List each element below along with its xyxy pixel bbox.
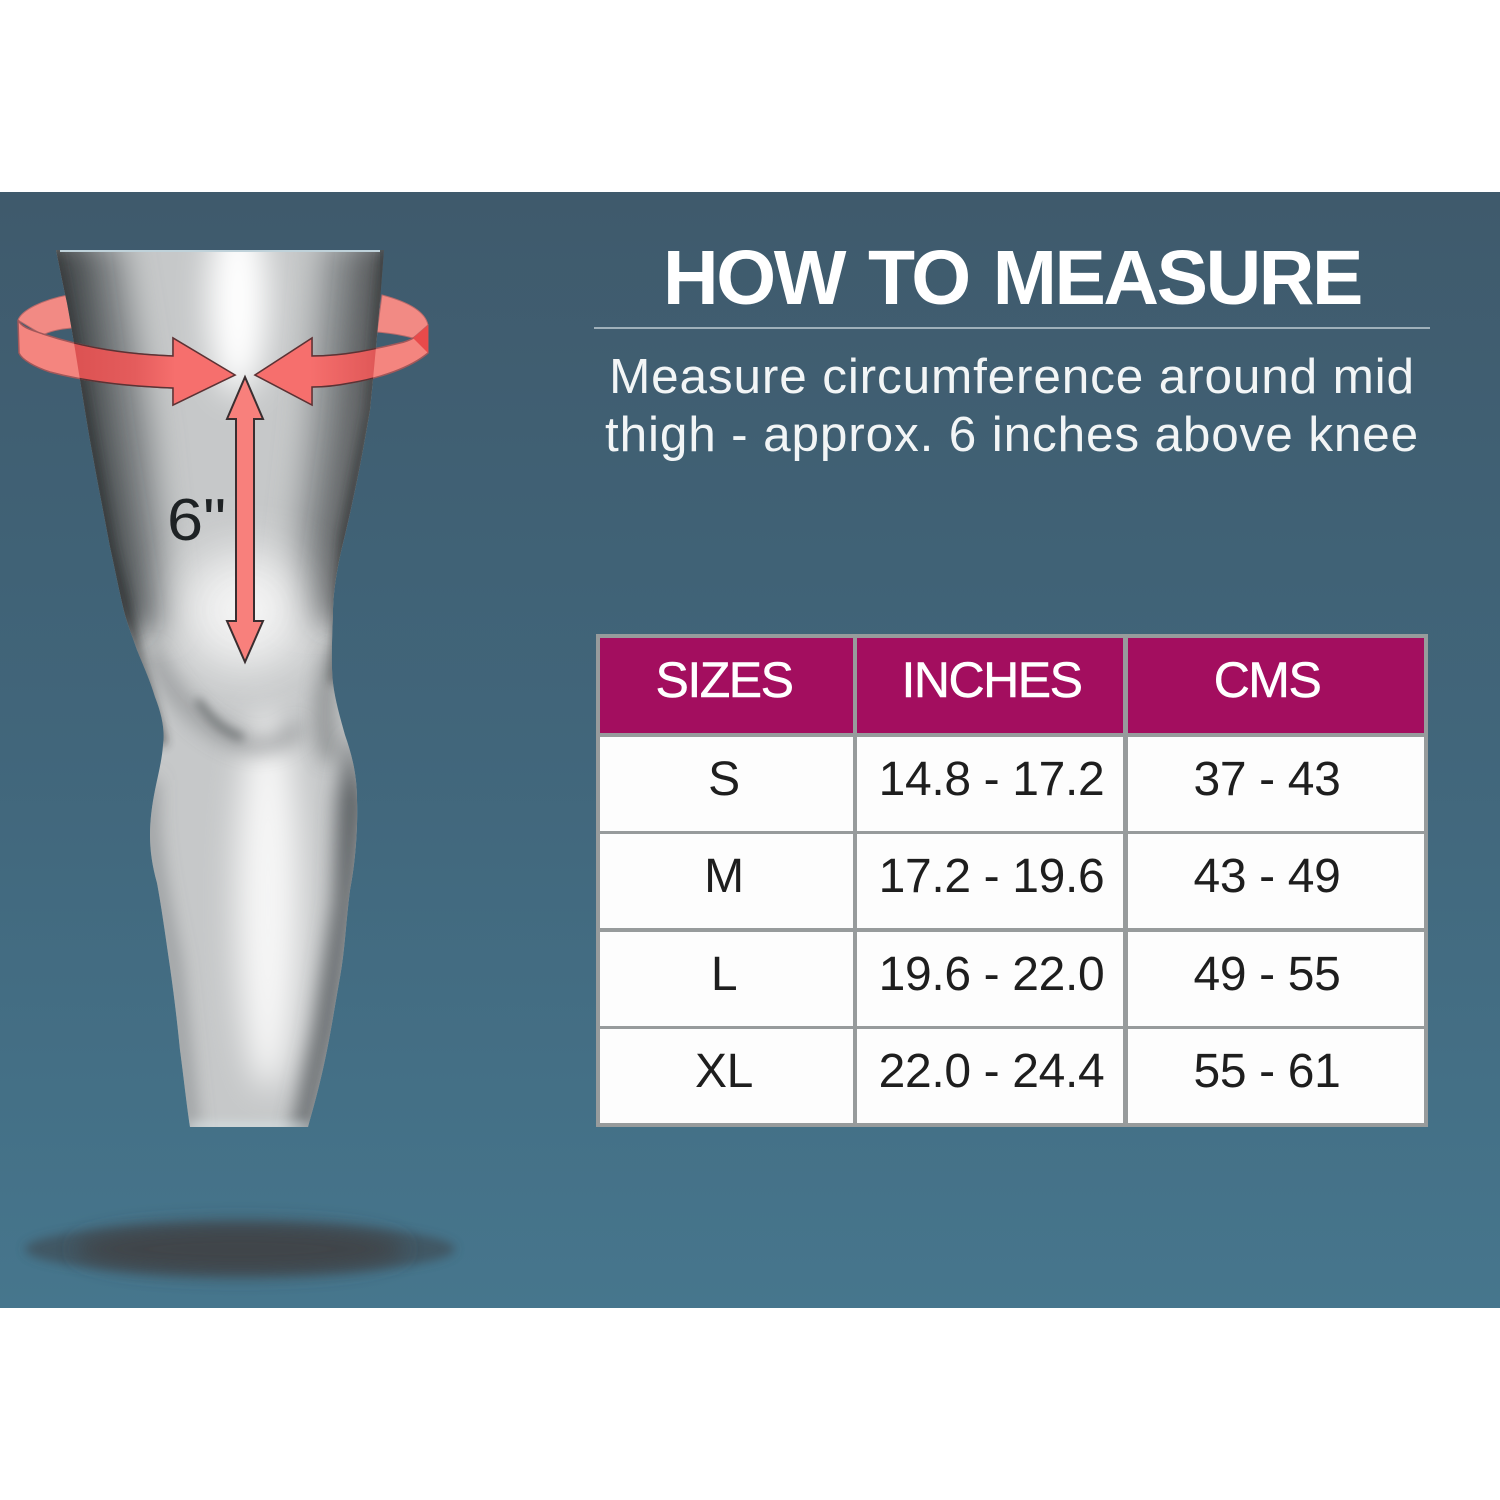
header: inches: INCHES [902,652,1081,708]
row XL size [600,1029,853,1123]
row XL inches [857,1029,1123,1123]
row M size: M [704,850,744,903]
header: cms [1128,638,1424,733]
row S size [600,737,853,831]
measuring band front left with arrow [18,320,235,405]
description [605,349,1419,462]
row L inches [857,932,1123,1026]
6 inch label: 6" [167,488,226,553]
size table [596,634,1428,1127]
band fold [413,325,428,353]
row L cms [1128,932,1424,1026]
row S cms [1128,737,1424,831]
description: Measure circumference around mid [609,349,1415,404]
row M inches [857,834,1123,928]
row L inches: 19.6 - 22.0 [879,948,1104,1001]
floor shadow [25,1223,455,1275]
row XL size: XL [695,1045,753,1098]
row XL cms [1128,1029,1424,1123]
row M cms: 43 - 49 [1194,850,1340,903]
row M inches: 17.2 - 19.6 [879,850,1104,903]
title: HOW TO MEASURE [663,235,1361,321]
row S inches [857,737,1123,831]
measuring band back left [18,295,72,335]
row S inches: 14.8 - 17.2 [879,753,1104,806]
header: inches [857,638,1123,733]
row L size: L [711,948,737,1001]
header: sizes: SIZES [656,652,792,708]
row M cms [1128,834,1424,928]
background panel [0,192,1500,1308]
row M size [600,834,853,928]
band over leg shading [74,336,376,406]
row L cms: 49 - 55 [1194,948,1340,1001]
row XL cms: 55 - 61 [1194,1045,1340,1098]
measuring band back right [377,295,428,338]
leg illustration [17,250,456,1285]
header: sizes [600,638,853,733]
row S size: S [708,753,740,806]
row XL inches: 22.0 - 24.4 [879,1045,1104,1098]
measuring band front right with arrow [255,326,428,405]
description: thigh - approx. 6 inches above knee [605,407,1419,462]
vertical 6 inch arrow [227,377,263,662]
row S cms: 37 - 43 [1194,753,1340,806]
header: cms: CMS [1214,652,1320,708]
leg shape [56,250,384,1127]
row L size [600,932,853,1026]
